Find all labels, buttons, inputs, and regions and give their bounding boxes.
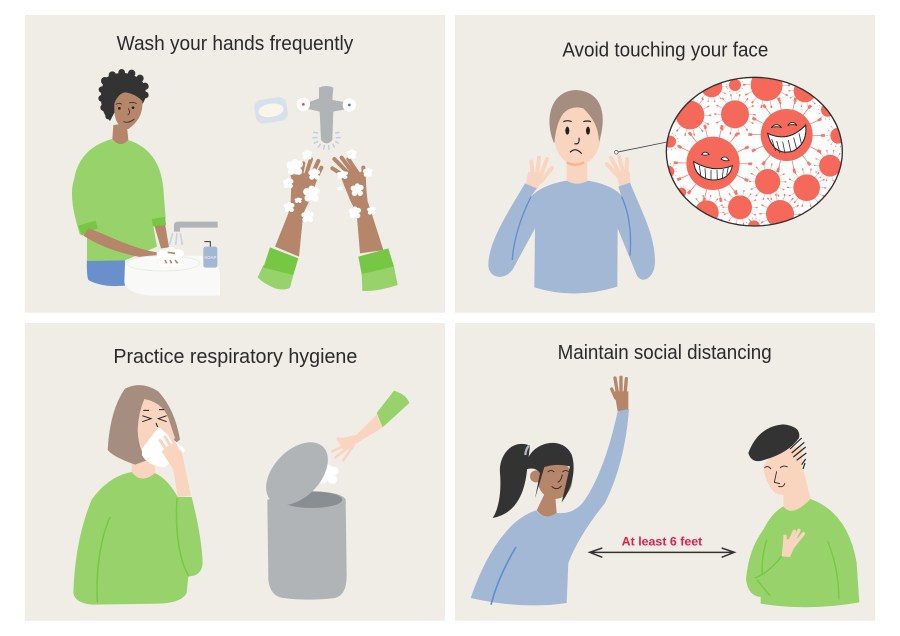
panel: wash your hands bbox=[25, 15, 445, 313]
sink with tap and soap: SOAP bbox=[204, 255, 216, 260]
arm dropping tissue bbox=[332, 391, 409, 460]
grinning virus right bbox=[750, 99, 823, 171]
sink with tap and soap bbox=[124, 222, 220, 296]
heading: social distancing: Maintain social distancing bbox=[558, 342, 772, 364]
woman raising hand bbox=[471, 377, 629, 605]
panel: practice respiratory hygiene bbox=[25, 323, 445, 621]
icon: tap and water drops bbox=[297, 86, 356, 149]
panel background bbox=[25, 15, 445, 313]
label: at least 6 feet: At least 6 feet bbox=[622, 534, 702, 548]
distance arrow bbox=[590, 548, 734, 557]
heading: wash hands: Wash your hands frequently bbox=[117, 33, 353, 55]
panel: maintain social distancing bbox=[455, 323, 875, 621]
heading: avoid touching: Avoid touching your face bbox=[562, 40, 768, 62]
sneezing woman with tissue bbox=[73, 385, 203, 605]
panel: avoid touching your face bbox=[455, 15, 875, 313]
pointer line to magnified view bbox=[614, 142, 667, 154]
trash bin with lid bbox=[254, 431, 347, 600]
heading: respiratory hygiene: Practice respiratory hygiene bbox=[113, 346, 357, 368]
worried man in blue sweater bbox=[488, 90, 655, 294]
man washing hands at sink bbox=[72, 69, 169, 286]
panel background bbox=[455, 323, 875, 621]
man bowing with hand on chest bbox=[746, 424, 859, 607]
soapy hands and sleeves bbox=[258, 149, 398, 291]
magnified virus circle bbox=[666, 76, 843, 227]
grinning virus left bbox=[676, 126, 750, 201]
panel background bbox=[25, 323, 445, 621]
panel background bbox=[455, 15, 875, 313]
icon: soap dish bbox=[253, 96, 289, 125]
